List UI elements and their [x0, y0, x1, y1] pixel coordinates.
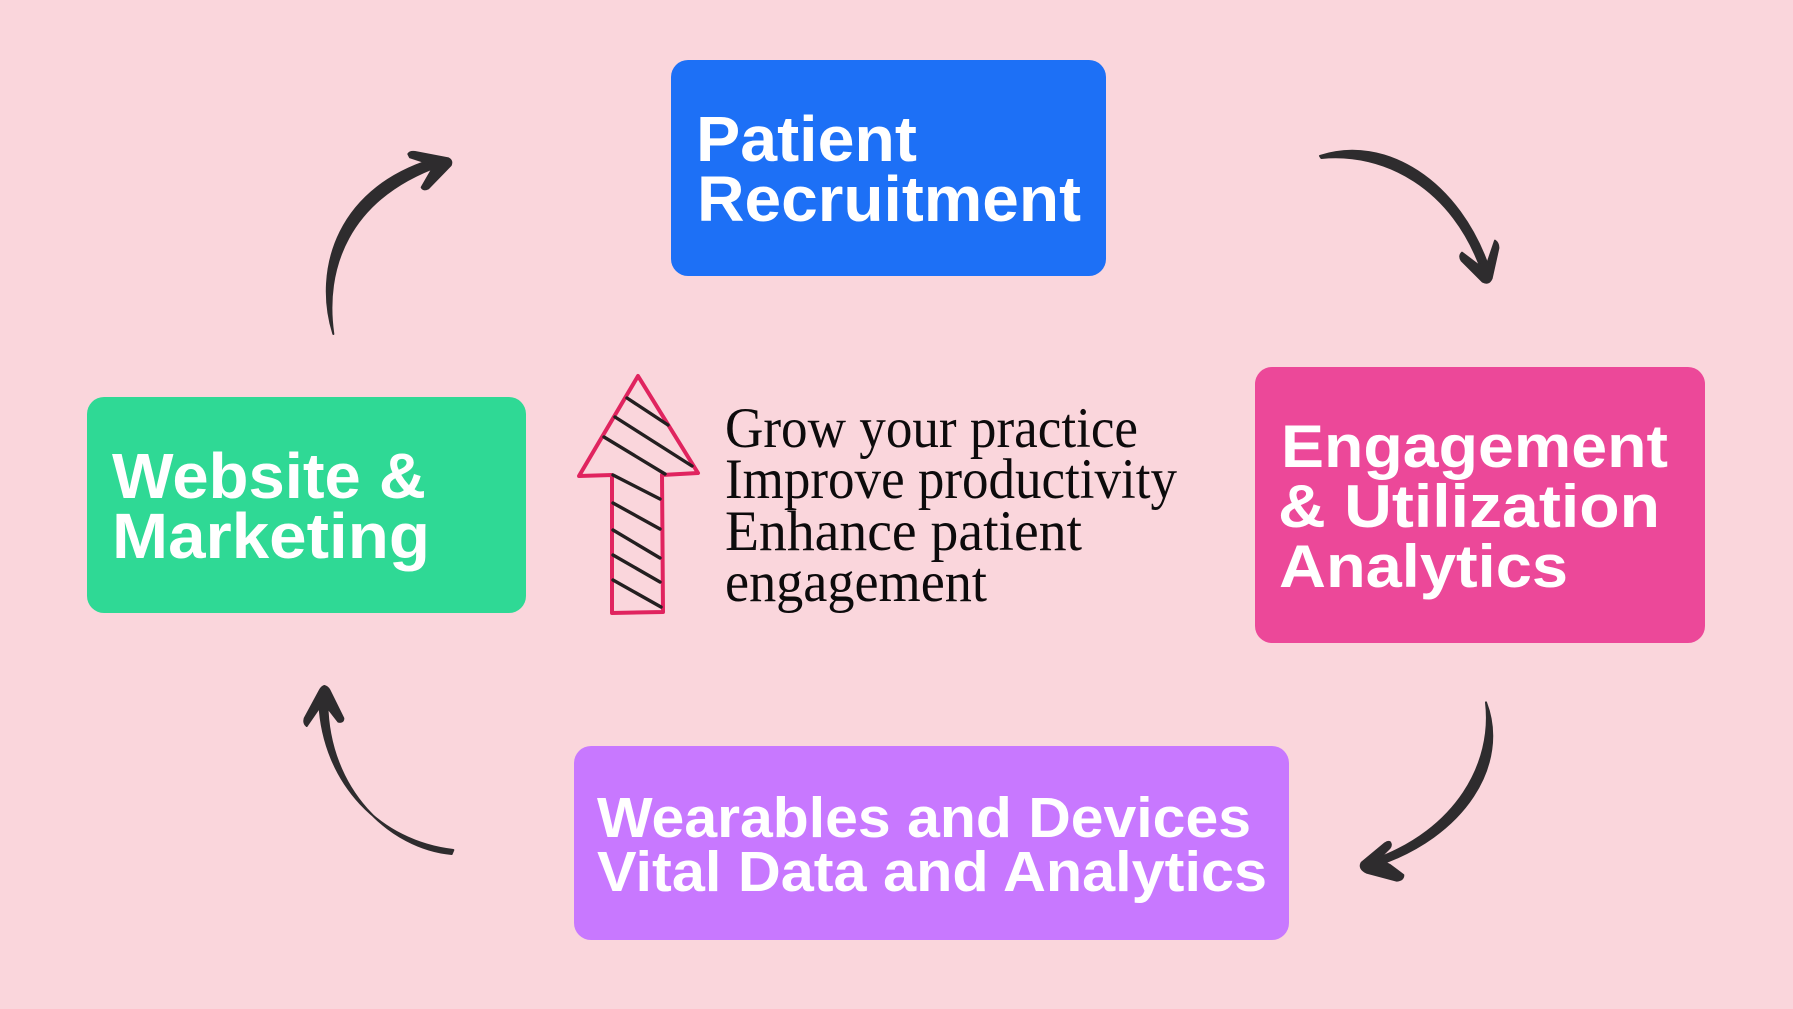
panel: website and marketing: Website & [112, 440, 426, 512]
panel: patient recruitment: Recruitment [697, 163, 1081, 235]
panel: wearables and devices: Wearables and Devices [597, 786, 1251, 850]
panel: engagement and utilization analytics: & Utilization [1278, 473, 1660, 540]
text block: benefits: Improve productivity [725, 448, 1177, 511]
panel: wearables and devices [574, 746, 1289, 940]
panel: patient recruitment: Patient [696, 103, 917, 175]
panel: engagement and utilization analytics [1255, 367, 1705, 643]
arrow: analytics to wearables [1361, 702, 1492, 881]
arrow: patient recruitment to analytics [1320, 151, 1498, 283]
panel: website and marketing [87, 397, 526, 613]
panel: wearables and devices: Vital Data and Analytics [597, 840, 1267, 904]
panel: patient recruitment [671, 60, 1106, 276]
text block: benefits [725, 397, 1177, 614]
text block: benefits: Enhance patient [725, 500, 1082, 563]
panel: engagement and utilization analytics: Engagement [1281, 413, 1668, 480]
text block: benefits: engagement [725, 551, 987, 614]
icon: hatched up arrow [579, 376, 698, 613]
arrow: website to patient recruitment [327, 152, 451, 334]
text block: benefits: Grow your practice [725, 397, 1138, 460]
arrow: wearables to website [304, 686, 453, 854]
panel: engagement and utilization analytics: Analytics [1279, 533, 1568, 600]
panel: website and marketing: Marketing [112, 500, 430, 572]
